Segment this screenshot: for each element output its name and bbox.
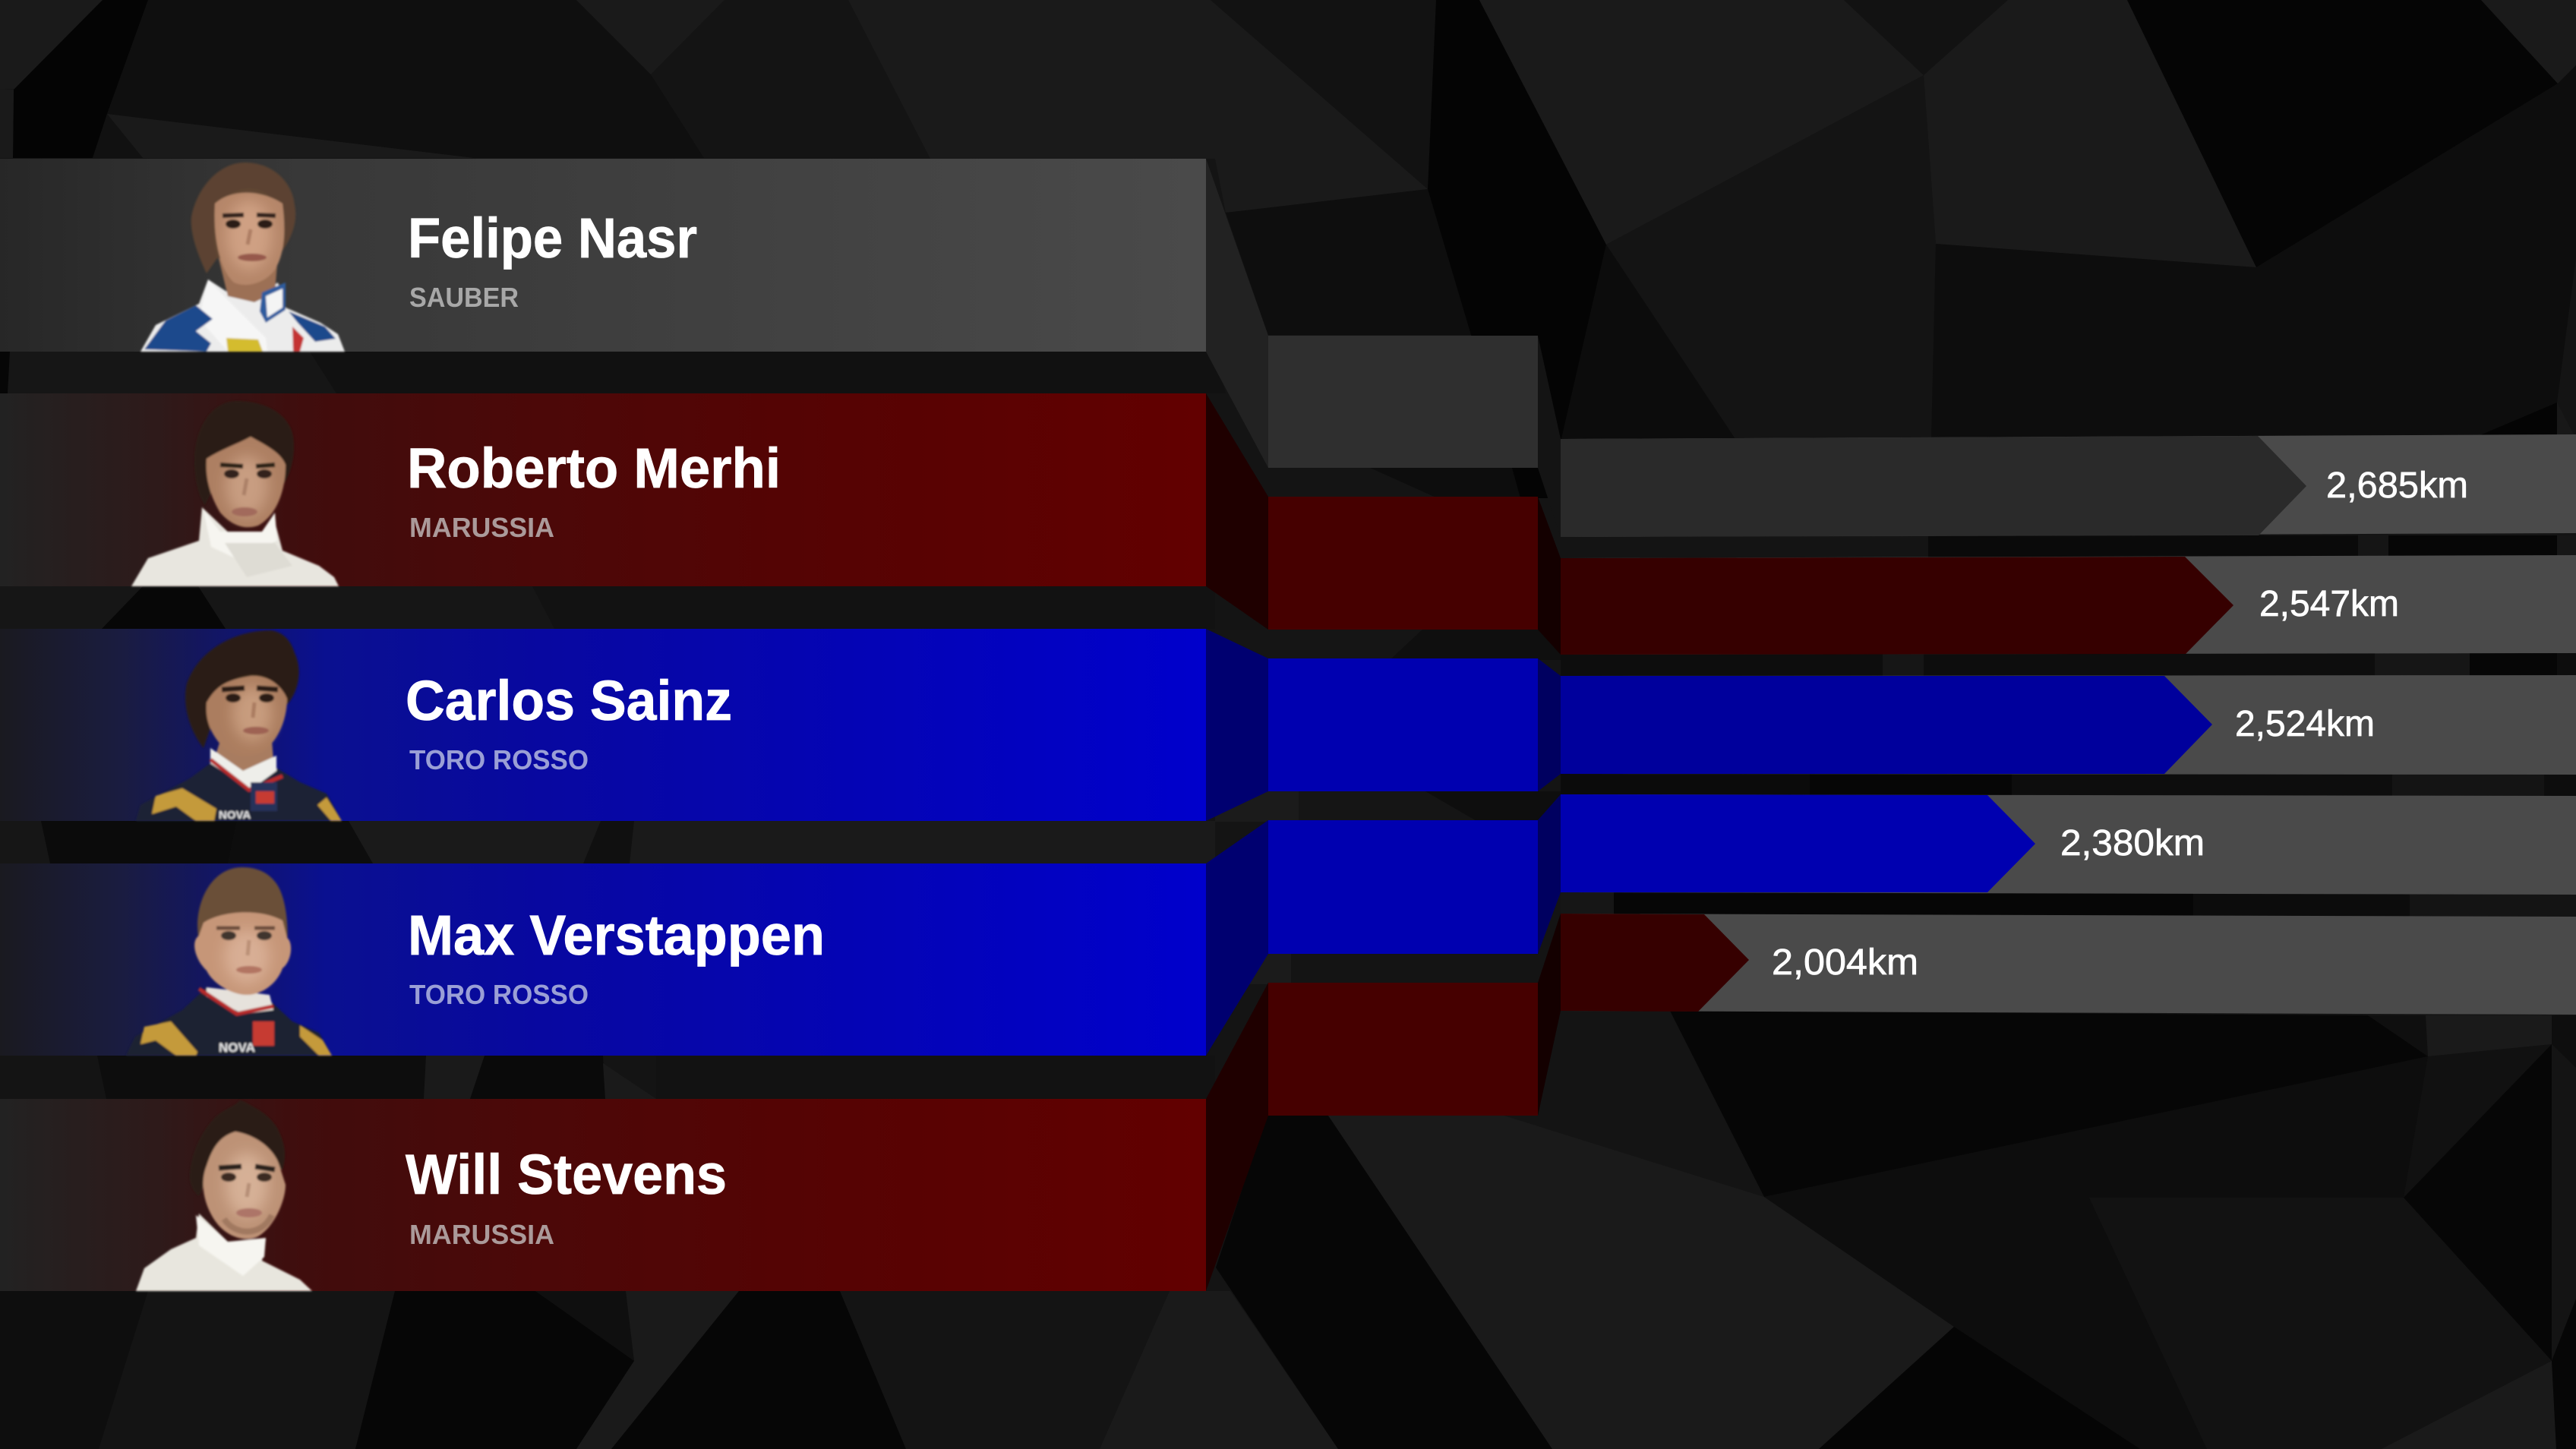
value: Verstappen: 2,380km: [2060, 823, 2205, 863]
row band: [0, 393, 1206, 586]
team name: MARUSSIA: [409, 512, 554, 543]
portrait: Max Verstappen: [126, 867, 332, 1056]
block: Verstappen: [1268, 820, 1538, 954]
value: Stevens: 2,004km: [1772, 942, 1918, 983]
bar track: Merhi: [1561, 555, 2576, 655]
panel: Felipe Nasr: [0, 159, 1206, 352]
connector: Sainz, first stage: [1206, 629, 1268, 821]
flow connectors between driver rows and middle blocks: [1206, 159, 1268, 1291]
connector: Stevens, first stage: [1206, 983, 1268, 1291]
block: Merhi: [1268, 497, 1538, 630]
panel: Max Verstappen: [0, 863, 1206, 1056]
portrait: Will Stevens: [136, 1100, 312, 1291]
block: Sainz: [1268, 658, 1538, 791]
connector: Verstappen, second stage: [1538, 794, 1561, 954]
block: Stevens: [1268, 983, 1538, 1116]
block: Nasr: [1268, 336, 1538, 468]
portrait: Max Verstappen: NOVA: [219, 1040, 255, 1055]
driver name: Carlos Sainz: [406, 669, 732, 732]
connector: Verstappen, first stage: [1206, 820, 1268, 1056]
connector: Merhi, first stage: [1206, 393, 1268, 630]
driver name: Felipe Nasr: [408, 207, 697, 270]
connector: Sainz, second stage: [1538, 658, 1561, 791]
bar track: Stevens: [1561, 914, 2576, 1015]
driver name: Max Verstappen: [408, 904, 825, 967]
team name: SAUBER: [409, 282, 519, 313]
value: Sainz: 2,524km: [2235, 704, 2375, 744]
portrait: Carlos Sainz: [136, 630, 342, 822]
connector: Nasr, first stage: [1206, 159, 1268, 468]
chart: distance bars: [1561, 434, 2576, 1015]
panel: Carlos Sainz: [0, 629, 1206, 822]
bar: Nasr 2,685km: [1561, 436, 2306, 537]
portrait: Roberto Merhi: [131, 401, 339, 586]
bar: Verstappen 2,380km: [1561, 794, 2035, 892]
connector: Nasr, second stage: [1538, 336, 1561, 537]
portrait: Carlos Sainz: NOVA: [219, 809, 251, 822]
team name: MARUSSIA: [409, 1219, 554, 1250]
connector: Merhi, second stage: [1538, 497, 1561, 655]
row band: [0, 159, 1206, 352]
value: Nasr: 2,685km: [2326, 466, 2468, 506]
bar track: Sainz: [1561, 675, 2576, 775]
connector: Stevens, second stage: [1538, 914, 1561, 1116]
flow connectors between middle blocks and distance bars: [1538, 336, 1561, 1116]
row band: [0, 863, 1206, 1056]
bar: Merhi 2,547km: [1561, 557, 2233, 655]
bar track: Nasr: [1561, 434, 2576, 537]
value: Merhi: 2,547km: [2259, 584, 2399, 624]
row band: [0, 629, 1206, 821]
team name: TORO ROSSO: [409, 979, 589, 1010]
bar: Stevens 2,004km: [1561, 914, 1749, 1012]
portrait: Felipe Nasr: [140, 163, 345, 352]
middle blocks: [1268, 336, 1538, 1116]
bar: Sainz 2,524km: [1561, 676, 2212, 774]
driver name: Will Stevens: [406, 1143, 727, 1206]
bar track: Verstappen: [1561, 794, 2576, 895]
row band: [0, 1099, 1206, 1291]
panel: Will Stevens: [0, 1099, 1206, 1291]
team name: TORO ROSSO: [409, 744, 589, 775]
driver name: Roberto Merhi: [407, 437, 781, 500]
panel: Roberto Merhi: [0, 393, 1206, 586]
